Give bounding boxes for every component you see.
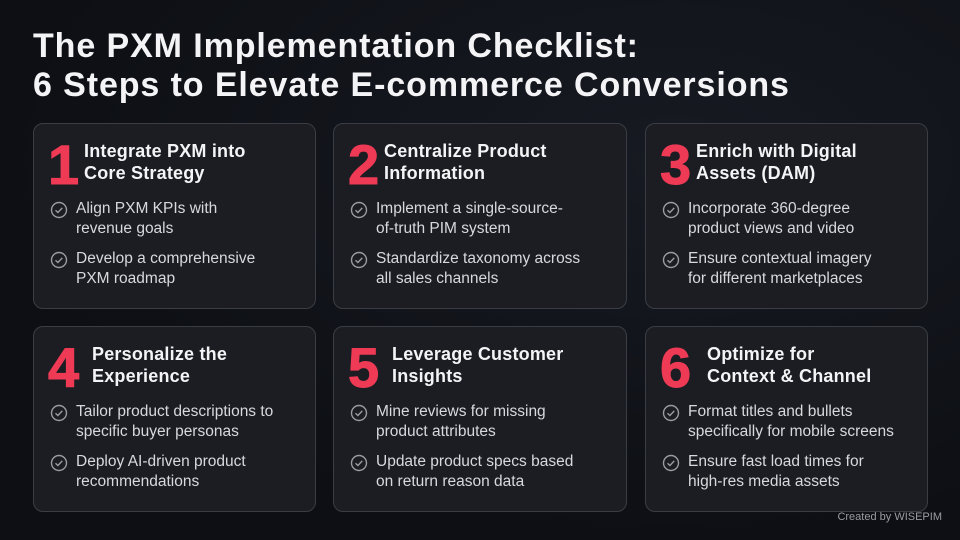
bullet: [50, 250, 255, 287]
bullet: [662, 453, 864, 490]
heading: Optimize for: [707, 344, 814, 364]
number 6: 6: [660, 336, 691, 399]
heading: [84, 141, 246, 183]
bullet: [350, 250, 580, 287]
panel: step 3: [645, 123, 928, 309]
bullet: [350, 200, 563, 237]
number 5: 5: [348, 336, 379, 399]
bullet: recommendations: [76, 473, 199, 490]
heading: Core Strategy: [84, 163, 205, 183]
bullet: product views and video: [688, 220, 854, 237]
bullet: [662, 403, 894, 440]
bullet: Align PXM KPIs with: [76, 200, 217, 217]
heading: [92, 344, 227, 386]
number 4: 4: [48, 336, 79, 399]
bullet: for different marketplaces: [688, 270, 863, 287]
panel: step 6: [645, 326, 928, 512]
bullet: [50, 200, 217, 237]
bullet: specific buyer personas: [76, 423, 239, 440]
bullet: PXM roadmap: [76, 270, 175, 287]
bullet: Mine reviews for missing: [376, 403, 546, 420]
bullet: [50, 403, 273, 440]
panel: step 1: [33, 123, 316, 309]
number 2: 2: [348, 133, 379, 196]
bullet: all sales channels: [376, 270, 498, 287]
bullet: [662, 250, 872, 287]
credit: Created by WISEPIM: [837, 511, 942, 523]
bullet: Tailor product descriptions to: [76, 403, 273, 420]
heading: [707, 344, 871, 386]
heading: Integrate PXM into: [84, 141, 246, 161]
bullet: [50, 453, 246, 490]
heading: Context & Channel: [707, 366, 871, 386]
bullet: high-res media assets: [688, 473, 840, 490]
panel: step 2: [333, 123, 627, 309]
title: [33, 27, 790, 104]
bullet: Ensure fast load times for: [688, 453, 864, 470]
bullet: of-truth PIM system: [376, 220, 510, 237]
bullet: Format titles and bullets: [688, 403, 853, 420]
heading: Information: [384, 163, 485, 183]
heading: Assets (DAM): [696, 163, 815, 183]
panel: step 4: [33, 326, 316, 512]
bullet: [350, 403, 546, 440]
bullet: product attributes: [376, 423, 496, 440]
heading: Leverage Customer: [392, 344, 563, 364]
panel: step 5: [333, 326, 627, 512]
heading: [392, 344, 563, 386]
heading: Enrich with Digital: [696, 141, 857, 161]
heading: [384, 141, 547, 183]
bullet: specifically for mobile screens: [688, 423, 894, 440]
bullet: [662, 200, 854, 237]
heading: [696, 141, 857, 183]
bullet: Standardize taxonomy across: [376, 250, 580, 267]
bullet: [350, 453, 573, 490]
number 1: 1: [48, 133, 79, 196]
bullet: Implement a single-source-: [376, 200, 563, 217]
bullet: revenue goals: [76, 220, 173, 237]
bullet: Ensure contextual imagery: [688, 250, 872, 267]
bullet: Deploy AI-driven product: [76, 453, 246, 470]
number 3: 3: [660, 133, 691, 196]
title: The PXM Implementation Checklist:: [33, 27, 639, 65]
heading: Experience: [92, 366, 190, 386]
bullet: Update product specs based: [376, 453, 573, 470]
title: 6 Steps to Elevate E-commerce Conversions: [33, 66, 790, 104]
heading: Centralize Product: [384, 141, 547, 161]
heading: Insights: [392, 366, 463, 386]
bullet: on return reason data: [376, 473, 524, 490]
bullet: Develop a comprehensive: [76, 250, 255, 267]
heading: Personalize the: [92, 344, 227, 364]
bullet: Incorporate 360-degree: [688, 200, 850, 217]
